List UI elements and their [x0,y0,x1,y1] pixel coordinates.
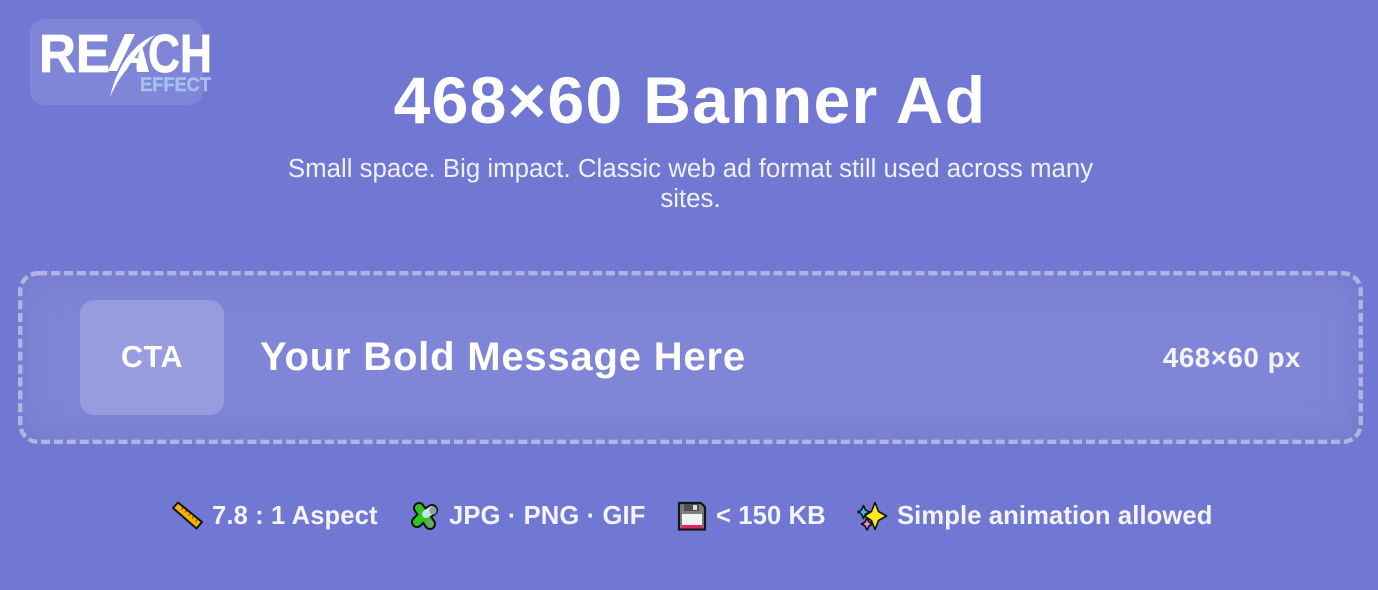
text: formats: JPG · PNG · GIF [449,502,645,530]
text: aspect: 7.8 : 1 Aspect [212,502,378,530]
size label: 468×60 px [1163,342,1301,373]
icon: sparkles [857,502,888,531]
logo wordmark: REACH: CH [148,24,212,84]
icon: ruler [172,502,203,530]
icon: puzzle piece [411,502,438,530]
text: file size: < 150 KB [716,502,826,530]
feature: formats [411,502,645,530]
feature: file size [678,502,826,531]
banner message: Your Bold Message Here [260,335,746,379]
CTA button: CTA [121,340,183,374]
title: 468×60 Banner Ad [394,63,986,137]
panel: banner mock-up [18,271,1363,444]
text: animation: Simple animation allowed [897,502,1213,530]
subtitle: Small space. Big impact. Classic web ad format still used across many sites. [288,155,1093,213]
logo: Reach Effect [30,19,203,105]
feature: animation [857,502,1213,531]
logo wordmark: REACH: RE [39,24,110,84]
logo subtext: EFFECT: EFFECT [140,75,211,96]
feature: aspect ratio [172,502,378,530]
icon: floppy disk [678,502,706,531]
logo wordmark: REACH [39,24,212,97]
CTA button [80,300,224,415]
